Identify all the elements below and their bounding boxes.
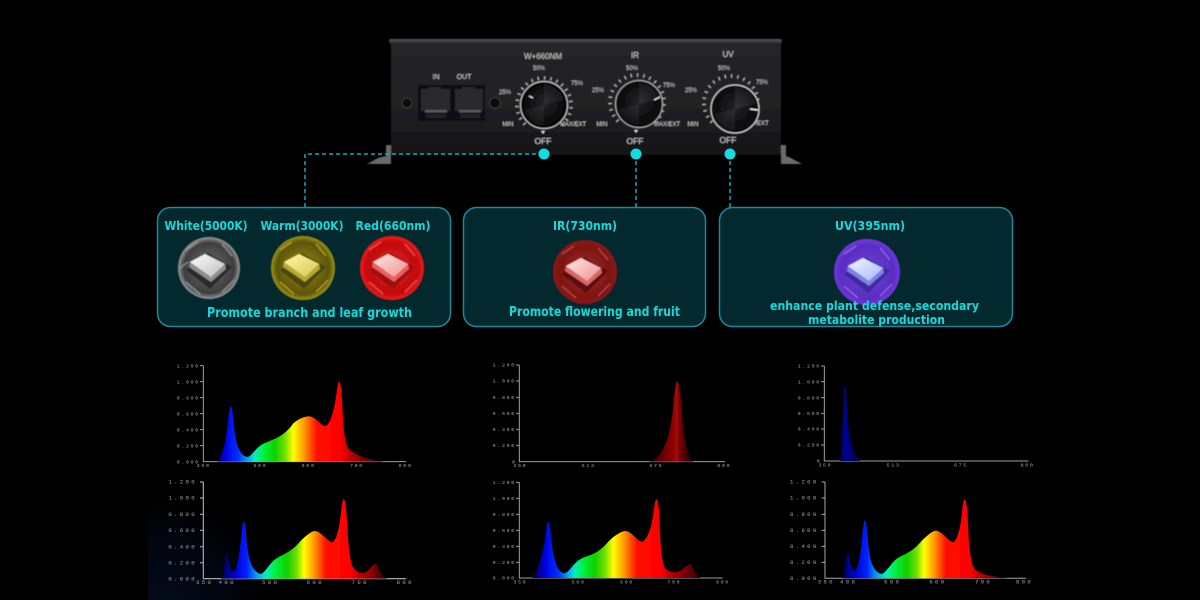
chart: all channels spectrum, right: 1.200: [790, 479, 819, 486]
chart: white + warm + red spectrum: [177, 363, 413, 469]
chart: UV spectrum: 675: [954, 462, 968, 468]
label: IR(730nm): IR(730nm): [553, 219, 617, 233]
chart: all channels spectrum, left: 400: [219, 579, 236, 586]
dial: IR: MAX/EXT: [654, 122, 681, 128]
port labels: [432, 74, 472, 81]
chart: UV spectrum: 513: [887, 462, 901, 468]
mounting foot: left: [367, 145, 391, 164]
chart: all channels spectrum, right: 500: [884, 579, 901, 586]
chart: all channels spectrum, middle: [493, 480, 730, 585]
chart: white + warm + red spectrum: 0.200: [177, 443, 200, 449]
chart: IR spectrum: 0.400: [493, 427, 516, 433]
chart: white + warm + red spectrum: 0.600: [177, 411, 200, 417]
chart: UV spectrum: 350: [818, 462, 832, 468]
chart: all channels spectrum, left: 0.000: [168, 575, 197, 582]
dial: IR: 25%: [592, 88, 605, 94]
dial: W+660NM: MAX/EXT: [560, 122, 587, 128]
chart: all channels spectrum, right: 350: [818, 579, 835, 586]
chart: all channels spectrum, middle: 0.400: [493, 544, 516, 550]
icon: IR LED: [553, 240, 617, 304]
chart: white + warm + red spectrum: 0.400: [177, 427, 200, 433]
chart: white + warm + red spectrum: 0.800: [177, 395, 200, 401]
caption: plant defense line 1: enhance plant defense,secondary: [770, 298, 979, 313]
label: UV(395nm): UV(395nm): [835, 219, 905, 233]
chart: all channels spectrum, middle: 350: [513, 579, 527, 585]
connector: IR channel: [635, 154, 637, 207]
panel: IR LED: [464, 208, 706, 326]
chart: all channels spectrum, middle: 1.200: [493, 480, 516, 486]
chart: all channels spectrum, left: 700: [352, 579, 369, 586]
chart: all channels spectrum, left: 600: [307, 579, 324, 586]
icon: red LED: [360, 236, 424, 300]
port labels: OUT: [457, 74, 472, 81]
chart: white + warm + red spectrum: 1.000: [177, 379, 200, 385]
dial: UV: 25%: [685, 88, 698, 94]
dial: UV: MIN: [688, 122, 698, 128]
chart: white + warm + red spectrum: 800: [399, 463, 413, 469]
label: Warm(3000K): Warm(3000K): [260, 219, 344, 233]
RJ45 ports: [418, 85, 485, 121]
chart: all channels spectrum, middle: 700: [667, 579, 681, 585]
chart: all channels spectrum, middle: 0.800: [493, 512, 516, 518]
caption: plant defense line 2: metabolite production: [808, 312, 945, 327]
caption: flowering and fruit: Promote flowering and fruit: [509, 305, 680, 320]
chart: IR spectrum: 675: [649, 463, 663, 469]
chart: all channels spectrum, left: 1.200: [168, 479, 197, 486]
dial: W+660NM: OFF: [534, 136, 552, 146]
screw: right: [490, 98, 500, 108]
chart: IR spectrum: [493, 363, 731, 469]
chart: all channels spectrum, right: 400: [840, 579, 857, 586]
chart: IR spectrum: 0.800: [493, 395, 516, 401]
chart: IR spectrum: 0: [512, 459, 517, 465]
chart: UV spectrum: 1.000: [798, 379, 821, 385]
chart: UV spectrum: [798, 364, 1035, 468]
chart: UV spectrum: 0.600: [798, 411, 821, 417]
dial: IR: [592, 51, 681, 146]
chart: all channels spectrum, right: 0.800: [790, 511, 819, 518]
chart: all channels spectrum, right: 800: [1016, 579, 1033, 586]
chart: white + warm + red spectrum: 600: [302, 463, 316, 469]
panel: UV LED: [720, 208, 1012, 327]
chart: IR spectrum: 0.600: [493, 411, 516, 417]
port labels: IN: [432, 74, 440, 81]
chart: white + warm + red spectrum: 700: [350, 463, 364, 469]
chart: all channels spectrum, right: [790, 479, 1033, 586]
chart: all channels spectrum, middle: 0.000: [493, 576, 516, 582]
chart: all channels spectrum, left: 0.200: [168, 559, 197, 566]
chart: all channels spectrum, left: 350: [196, 579, 213, 586]
chart: all channels spectrum, left: [168, 479, 414, 586]
chart: all channels spectrum, left: 0.400: [168, 543, 197, 550]
chart: all channels spectrum, left: 0.800: [168, 511, 197, 518]
dial: IR: 75%: [663, 83, 676, 89]
chart: white + warm + red spectrum: 0.000: [177, 459, 200, 465]
chart: UV spectrum: 0: [817, 459, 821, 465]
chart: all channels spectrum, right: 0.400: [790, 543, 819, 550]
dial: UV: 50%: [718, 66, 731, 72]
chart: UV spectrum: 0.400: [798, 427, 821, 433]
chart: white + warm + red spectrum: 1.200: [177, 363, 200, 369]
connector: white/warm/red channel: [305, 154, 544, 207]
chart: all channels spectrum, left: 500: [262, 579, 279, 586]
dial: W+660NM: 75%: [571, 81, 584, 87]
dial: UV: OFF: [720, 135, 736, 145]
chart: all channels spectrum, middle: 600: [620, 579, 634, 585]
background glow: [148, 500, 268, 600]
chart: all channels spectrum, middle: 800: [716, 579, 730, 585]
chart: all channels spectrum, middle: 1.000: [493, 496, 516, 502]
chart: UV spectrum: 0.800: [798, 395, 821, 401]
mounting foot: right: [781, 145, 802, 164]
dial: UV: [685, 50, 769, 145]
label: Red(660nm): Red(660nm): [356, 219, 430, 233]
connector dots: [538, 148, 736, 160]
dial: W+660NM: W+660NM: [524, 52, 562, 61]
dial: UV: /EXT: [755, 121, 769, 127]
chart: IR spectrum: 350: [513, 463, 527, 469]
dial: IR: IR: [631, 51, 639, 60]
chart: UV spectrum: 0.200: [798, 443, 821, 449]
chart: all channels spectrum, right: 1.000: [790, 495, 819, 502]
panel: white, warm and red LEDs: [158, 208, 450, 326]
screw: left: [402, 98, 412, 108]
chart: IR spectrum: 1.000: [493, 379, 516, 385]
chart: all channels spectrum, middle: 500: [572, 579, 586, 585]
chart: white + warm + red spectrum: 350: [197, 463, 211, 469]
chart: all channels spectrum, left: 800: [397, 579, 414, 586]
chart: white + warm + red spectrum: 500: [253, 463, 267, 469]
controller device: [367, 39, 802, 164]
chart: all channels spectrum, right: 0.200: [790, 559, 819, 566]
dial: W+660NM: MIN: [502, 122, 514, 128]
dial: W+660NM: [499, 52, 587, 146]
chart: IR spectrum: 0.200: [493, 443, 516, 449]
chart: all channels spectrum, left: 1.000: [168, 495, 197, 502]
chart: UV spectrum: 800: [1021, 462, 1035, 468]
icon: UV LED: [834, 239, 900, 305]
dial: W+660NM: 50%: [533, 66, 546, 72]
chart: IR spectrum: 513: [582, 463, 596, 469]
dial: UV: UV: [722, 50, 734, 59]
chart: IR spectrum: 800: [717, 463, 731, 469]
chart: all channels spectrum, middle: 0.600: [493, 528, 516, 534]
chart: all channels spectrum, right: 0.600: [790, 527, 819, 534]
dial: UV: 75%: [756, 80, 769, 86]
dial: IR: OFF: [626, 136, 644, 146]
chart: all channels spectrum, left: 0.600: [168, 527, 197, 534]
chart: all channels spectrum, middle: 0.200: [493, 560, 516, 566]
chart: all channels spectrum, right: 700: [975, 579, 992, 586]
icon: warm LED: [271, 236, 335, 300]
caption: branch and leaf growth: Promote branch and leaf growth: [207, 306, 412, 321]
top lip: [389, 39, 782, 44]
chart: all channels spectrum, right: 600: [929, 579, 947, 586]
icon: white LED: [178, 237, 240, 299]
dial: IR: 50%: [626, 66, 639, 72]
label: White(5000K): White(5000K): [164, 219, 248, 233]
connector: UV channel: [729, 154, 731, 207]
dial: IR: MIN: [596, 122, 608, 128]
chart: all channels spectrum, right: 0.000: [790, 575, 819, 582]
chart: IR spectrum: 1.200: [493, 363, 516, 369]
dial: W+660NM: 25%: [499, 90, 512, 96]
chart: UV spectrum: 1.200: [798, 364, 821, 370]
device body: [391, 41, 781, 155]
